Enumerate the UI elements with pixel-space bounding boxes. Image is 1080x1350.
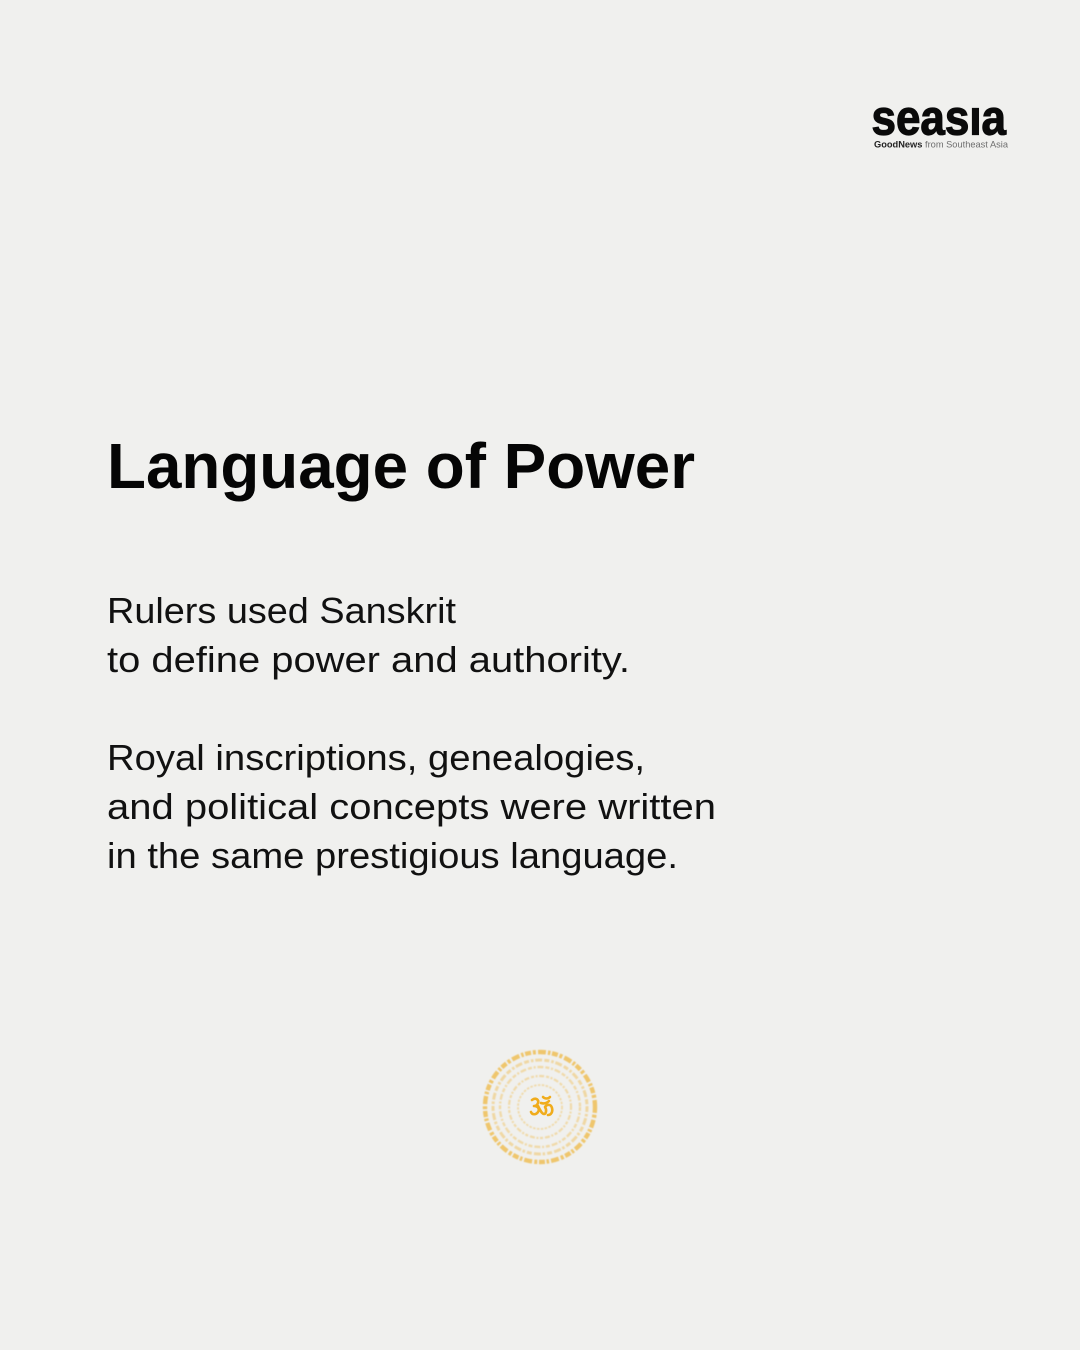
icon: om mantra circle xyxy=(485,1052,595,1162)
logo: seasia: seasia xyxy=(872,92,1007,146)
text block: inscriptions: in the same prestigious language. xyxy=(107,835,678,876)
icon: om symbol xyxy=(531,1097,552,1115)
logo: seasia xyxy=(872,107,1008,148)
text block: rulers: Rulers used Sanskrit xyxy=(107,590,456,631)
logo: seasia: GoodNews from Southeast Asia xyxy=(874,140,1009,150)
text block: rulers xyxy=(107,590,630,680)
title: Language of Power xyxy=(107,430,695,502)
text block: inscriptions: Royal inscriptions, genealogies, xyxy=(107,737,645,778)
text block: inscriptions: and political concepts were written xyxy=(107,786,716,827)
text block: inscriptions xyxy=(107,737,716,876)
text block: rulers: to define power and authority. xyxy=(107,639,630,680)
